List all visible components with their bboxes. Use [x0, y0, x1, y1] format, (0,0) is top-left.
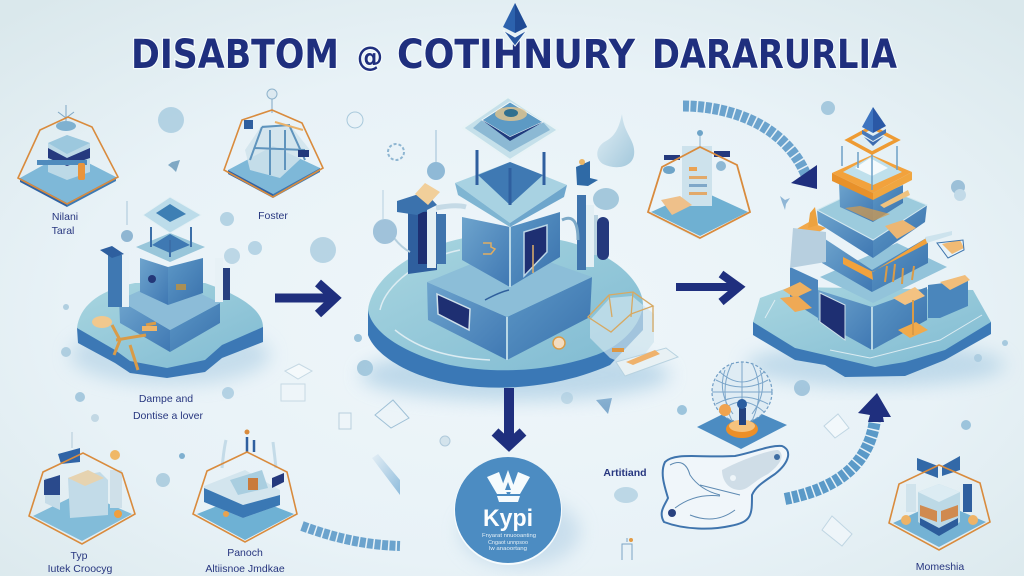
panel: central platform structure — [360, 97, 678, 401]
label: Typ Iutek Croocyg: Typ — [71, 550, 88, 562]
arrow: curved dashed bottom left — [302, 454, 400, 546]
title: DISABTOM — [131, 32, 339, 78]
lower block — [427, 248, 592, 360]
lower block — [119, 278, 220, 352]
label: Dampe and Dontise a lover: Dontise a lover — [133, 410, 204, 422]
hexagon outline — [648, 147, 750, 238]
tower body — [462, 212, 560, 287]
panel: left platform structure — [70, 197, 270, 385]
orange side details — [780, 207, 970, 338]
arrow: center to right — [676, 274, 739, 302]
panel: inset upper-right hexagon scene — [648, 130, 750, 240]
panel: inset bottom-left hexagon scene — [29, 432, 135, 544]
Kypi small text: Cngaot unnpsoo — [488, 540, 528, 546]
label: Nilani Taral: Nilani — [52, 211, 78, 223]
icon: Kypi logo — [487, 470, 530, 502]
arrow: left to center — [275, 283, 335, 314]
platform surface — [753, 287, 991, 367]
Kypi wordmark: Kypi — [483, 505, 533, 532]
panel: globe on diamond plate — [697, 362, 787, 449]
label: Dampe and Dontise a lover: Dampe and — [139, 393, 193, 405]
hexagon outline — [18, 117, 118, 204]
hexagon outline — [889, 465, 990, 550]
platform base — [368, 300, 643, 388]
Kypi small text — [482, 533, 536, 552]
left column — [373, 183, 466, 274]
right column — [562, 159, 619, 270]
mid tier — [822, 237, 928, 292]
icon: ethereum diamond above title — [503, 3, 527, 46]
hexagon outline — [193, 452, 297, 542]
label: Panoch Altiisnoe Jmdkae: Panoch — [227, 547, 263, 559]
panel: inset top-left hexagon scene — [18, 105, 118, 207]
label: Typ Iutek Croocyg — [48, 550, 113, 575]
panel: inset bottom-right hexagon scene — [889, 456, 990, 550]
tower — [136, 197, 205, 305]
title: DARARURLIA — [652, 32, 897, 78]
icon: water drop — [597, 114, 634, 167]
upper tier — [817, 183, 927, 258]
side columns — [100, 201, 240, 307]
Kypi small text: Fnyarat nnuooanting — [482, 533, 536, 539]
title: COTIHNURY — [397, 32, 636, 78]
platform surface — [368, 237, 643, 370]
label: Foster: Foster — [258, 210, 288, 222]
panel: Kypi badge — [454, 457, 580, 567]
support poles — [477, 150, 544, 205]
title — [131, 32, 897, 78]
top block — [839, 183, 910, 222]
panel: inset top hexagon scene — [224, 89, 323, 198]
platform base — [753, 310, 991, 377]
panel: outlined wrench diagram — [662, 446, 788, 529]
hexagon outline — [224, 110, 323, 197]
label: Dampe and Dontise a lover — [133, 393, 204, 422]
platform base — [77, 320, 263, 378]
golden wire cage and card — [588, 292, 678, 376]
arrow: center down to Kypi — [495, 388, 523, 445]
label: Typ Iutek Croocyg: Iutek Croocyg — [48, 563, 113, 575]
base block — [790, 243, 968, 350]
platform surface — [77, 283, 263, 368]
orange deck with glass room — [832, 146, 912, 200]
top plate — [463, 97, 558, 160]
title: @ — [357, 40, 383, 73]
decorative floating spheres and particles — [61, 101, 1008, 560]
label: Nilani Taral: Taral — [52, 225, 74, 237]
hexagon outline — [29, 453, 135, 544]
label: Artitiand: Artitiand — [603, 467, 647, 479]
Kypi small text: lw anaoortang — [489, 546, 527, 552]
panel: right stepped tower — [745, 107, 1005, 387]
panel: inset bottom hexagon scene — [193, 430, 297, 542]
orange machinery — [92, 316, 157, 370]
icon: ethereum crown — [862, 107, 886, 146]
label: Panoch Altiisnoe Jmdkae: Altiisnoe Jmdkae — [205, 563, 285, 575]
arrow: curved dashed top — [683, 106, 817, 189]
arrow: curved dashed bottom right — [785, 393, 891, 499]
orange top ring — [848, 127, 897, 153]
label: Momeshia: Momeshia — [916, 561, 964, 573]
label: Panoch Altiisnoe Jmdkae — [205, 547, 285, 575]
tower cap — [455, 162, 567, 227]
label: Nilani Taral — [52, 211, 78, 237]
